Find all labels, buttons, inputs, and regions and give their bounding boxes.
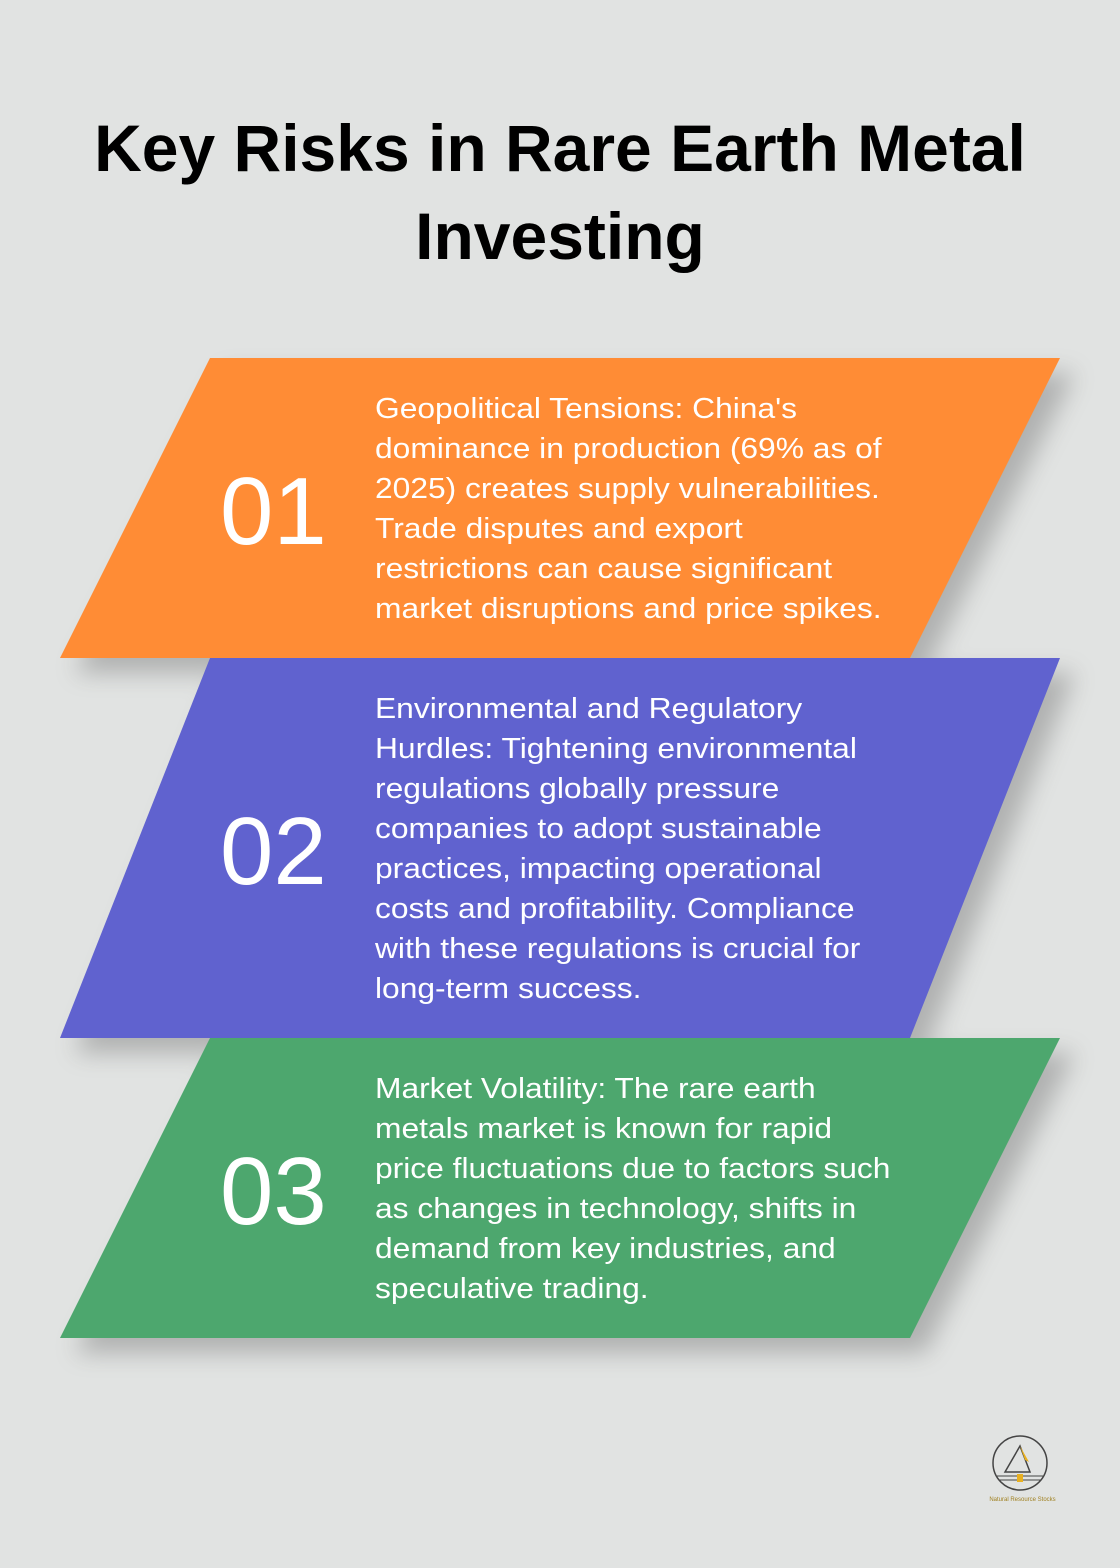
panel 3 text: price fluctuations due to factors such xyxy=(375,1153,890,1185)
panel 3 number: 03 xyxy=(220,1138,327,1245)
title: Key Risks in Rare Earth Metal xyxy=(94,111,1026,185)
panel 2 text: Hurdles: Tightening environmental xyxy=(375,733,857,765)
panel 1 text: 2025) creates supply vulnerabilities. xyxy=(375,473,880,505)
panel 2 shape xyxy=(60,658,1060,1038)
panel 1 shape xyxy=(60,358,1060,658)
panel 1 text: Geopolitical Tensions: China's xyxy=(375,393,797,425)
logo: Natural Resource Stocks xyxy=(989,1497,1056,1503)
panel 2 text: long-term success. xyxy=(375,973,641,1005)
panel 2 text: companies to adopt sustainable xyxy=(375,813,822,845)
panel 3 text: speculative trading. xyxy=(375,1273,649,1305)
logo xyxy=(989,1435,1056,1503)
panel 3 text xyxy=(375,1073,890,1305)
panel 1 text: market disruptions and price spikes. xyxy=(375,593,882,625)
panel 3 text: Market Volatility: The rare earth xyxy=(375,1073,816,1105)
panel 2 text: regulations globally pressure xyxy=(375,773,779,805)
panel 1 text: restrictions can cause significant xyxy=(375,553,832,585)
title: Investing xyxy=(415,199,705,273)
panel 2 text: Environmental and Regulatory xyxy=(375,693,802,725)
panel 3 text: metals market is known for rapid xyxy=(375,1113,832,1145)
panel 1 number: 01 xyxy=(220,458,327,565)
panel 1 text: Trade disputes and export xyxy=(375,513,743,545)
panel 2 text: with these regulations is crucial for xyxy=(375,933,860,965)
panel 3 shape xyxy=(60,1038,1060,1338)
panel 3 text: demand from key industries, and xyxy=(375,1233,836,1265)
panel 1 text: dominance in production (69% as of xyxy=(375,433,882,465)
panel 2 number: 02 xyxy=(220,798,327,905)
panel 1 text xyxy=(375,393,882,625)
title xyxy=(94,111,1026,273)
panel 2 text: costs and profitability. Compliance xyxy=(375,893,854,925)
panel 3 text: as changes in technology, shifts in xyxy=(375,1193,856,1225)
panel 2 text: practices, impacting operational xyxy=(375,853,822,885)
panel 2 text xyxy=(375,693,860,1005)
